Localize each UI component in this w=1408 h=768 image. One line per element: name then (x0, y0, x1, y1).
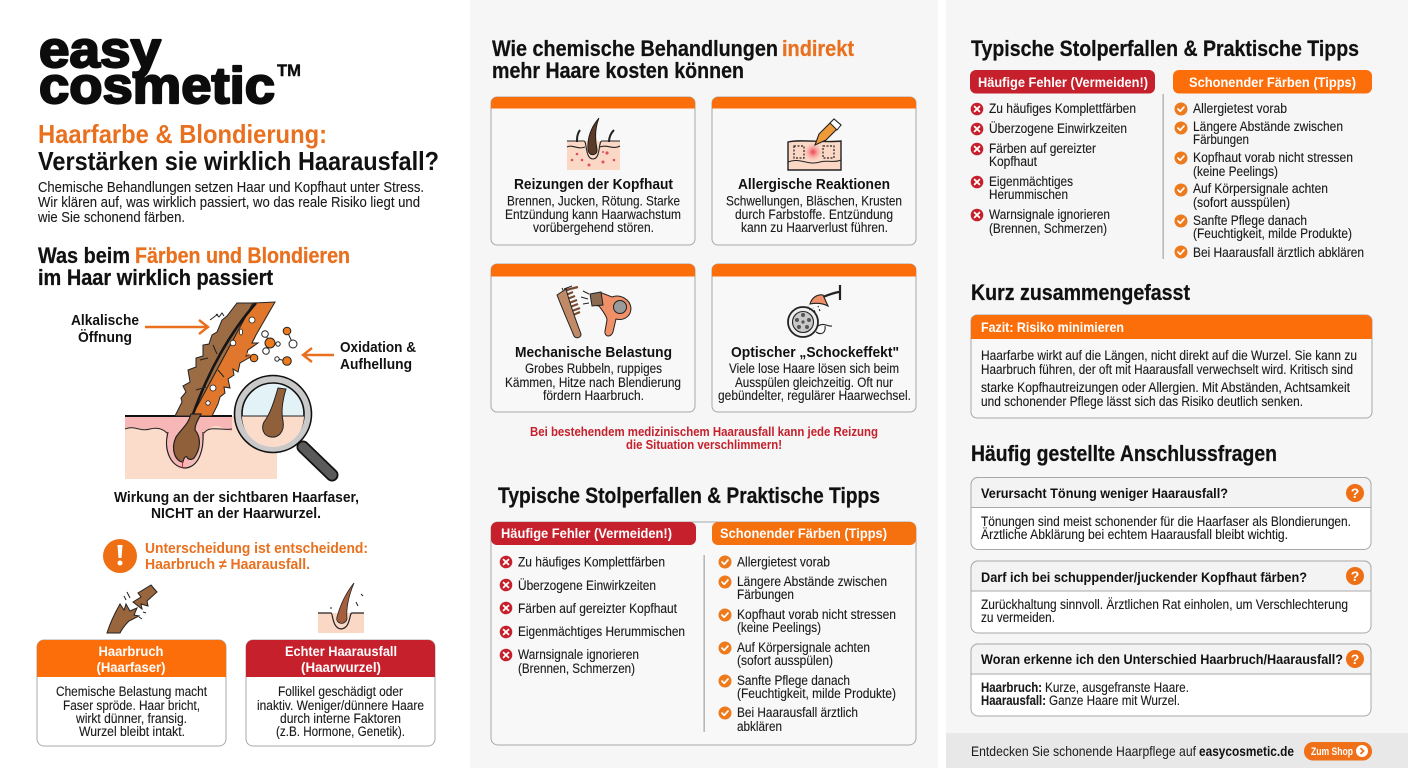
card: Echter Haarausfall: (Haarwurzel) (301, 659, 381, 675)
list: Fehler: Färben auf gereizter Kopfhaut (518, 601, 677, 616)
title: Haarfarbe & Blondierung: (38, 119, 327, 149)
list: Tipps: Färbungen (737, 587, 794, 602)
heading: Was beim Färben und Blondieren: Was beim (38, 243, 130, 268)
list: Tipps: (keine Peelings) (737, 620, 821, 635)
warning text: Bei bestehendem medizinischem Haarausfall kann jede Reizung (530, 424, 878, 439)
card: Echter Haarausfall: Follikel geschädigt oder (278, 684, 403, 699)
heading: Kurz zusammengefasst: Kurz zusammengefasst (971, 280, 1191, 305)
list: Fehler: Überzogene Einwirkzeiten (989, 121, 1127, 136)
card: Echter Haarausfall: Echter Haarausfall (285, 643, 397, 659)
list: Tipps: Auf Körpersignale achten (1193, 181, 1328, 196)
card: Haarbruch: (Haarfaser) (96, 659, 166, 675)
list: Tipps: Allergietest vorab (737, 554, 830, 570)
card: Fazit: Haarbruch führen, der oft mit Haarausfall verwechselt wird. Kritisch sind (981, 362, 1353, 377)
card: Allergische Reaktionen (712, 97, 916, 245)
heading: chemische Behandlungen (492, 36, 855, 83)
icon: molecules (240, 327, 297, 365)
icon: shower and drain (788, 285, 840, 337)
icon: comb and dryer (557, 286, 631, 338)
caption (114, 489, 359, 522)
intro text (37, 179, 424, 226)
FAQ 2 (971, 561, 1371, 633)
list: Tipps (1174, 101, 1364, 260)
panel: left column (37, 21, 439, 746)
card: Mechanische Belastung: Kämmen, Hitze nach Blendierung (505, 375, 681, 390)
label: Alkalische Öffnung (71, 312, 139, 346)
list: Fehler: Warnsignale ignorieren (518, 647, 639, 662)
list: Fehler: Eigenmächtiges (989, 174, 1073, 189)
card: Haarbruch: Faser spröde. Haar bricht, (63, 698, 200, 713)
FAQ 1 (971, 478, 1371, 550)
list: Fehler: (Brennen, Schmerzen) (989, 221, 1107, 236)
icon: allergy test (788, 119, 841, 170)
list: Tipps: (sofort ausspülen) (737, 653, 833, 668)
card: Haarbruch: Wurzel bleibt intakt. (79, 724, 185, 739)
list: Tipps: Auf Körpersignale achten (737, 640, 870, 655)
card: Mechanische Belastung: fördern Haarbruch. (543, 388, 644, 403)
list: Fehler: Färben auf gereizter (989, 141, 1096, 156)
list: Tipps: (Feuchtigkeit, milde Produkte) (737, 686, 896, 701)
label: Alkalische Öffnung: Alkalische (71, 312, 139, 329)
list: Tipps: (Feuchtigkeit, milde Produkte) (1193, 226, 1352, 241)
card: Echter Haarausfall (246, 640, 435, 746)
heading: Anschlussfragen: Häufig gestellte Anschlussfragen (971, 441, 1277, 466)
card: Haarbruch (37, 640, 226, 746)
list: Fehler: Kopfhaut (989, 154, 1037, 169)
heading: Was beim Färben und Blondieren: im Haar wirklich passiert (38, 265, 274, 290)
icon: broken hair (107, 585, 157, 633)
panel: Fehler und Tipps (491, 522, 916, 745)
heading: chemische Behandlungen: indirekt (782, 36, 855, 61)
panel: middle column (491, 36, 916, 745)
button: Zum Shop (1304, 742, 1372, 760)
divider (1162, 94, 1164, 259)
FAQ 3: Haarausfall: (981, 693, 1046, 708)
card: Fazit: starke Kopfhautreizungen oder Allergien. Mit Abständen, Achtsamkeit (981, 380, 1350, 395)
card: Fazit (971, 315, 1372, 418)
card: Optischer Schockeffekt: Viele lose Haare lösen sich beim (729, 361, 899, 376)
list: Tipps (718, 554, 896, 734)
list: Fehler: Zu häufiges Komplettfärben (518, 554, 665, 570)
warning text (530, 424, 878, 452)
list: Tipps: Bei Haarausfall ärztlich (737, 705, 858, 720)
FAQ 3 (971, 644, 1371, 716)
heading: Was beim Färben und Blondieren (38, 243, 350, 290)
list: Fehler: Warnsignale ignorieren (989, 207, 1110, 222)
button: Zum Shop: Zum Shop (1311, 746, 1353, 758)
card: Echter Haarausfall: durch interne Faktoren (280, 711, 401, 726)
panel: Fehler und Tipps: Schonender Färben (Tipps) (720, 525, 887, 541)
card: Mechanische Belastung: Grobes Rubbeln, ruppiges (525, 361, 662, 376)
badges: Fehler und Tipps: Schonender Färben (Tipps) (1189, 74, 1356, 90)
card: Mechanische Belastung (491, 264, 695, 412)
list: Tipps: Kopfhaut vorab nicht stressen (737, 607, 896, 622)
card: Optischer Schockeffekt: gebündelter, regulärer Haarwechsel. (718, 388, 911, 403)
card: Reizungen der Kopfhaut: Entzündung kann Haarwachstum (505, 207, 681, 222)
heading: Was beim Färben und Blondieren: Färben und Blondieren (135, 243, 350, 268)
list: Tipps: (keine Peelings) (1193, 164, 1278, 179)
card: Reizungen der Kopfhaut: Brennen, Jucken, Rötung. Starke (507, 194, 680, 208)
list: Tipps: Längere Abstände zwischen (1193, 119, 1343, 134)
FAQ 3: Kurze, ausgefranste Haare. (1045, 680, 1189, 695)
list: Fehler (500, 554, 685, 676)
heading: chemische Behandlungen: mehr Haare kosten können (492, 58, 744, 83)
warning text: die Situation verschlimmern! (626, 437, 782, 452)
logo (39, 21, 301, 114)
FAQ 3: Haarbruch: (981, 680, 1042, 695)
card: Fazit: und schonender Pflege lässt sich das Risiko deutlich senken. (981, 394, 1303, 409)
list: Fehler: Überzogene Einwirkzeiten (518, 578, 656, 593)
list: Fehler: Zu häufiges Komplettfärben (989, 101, 1136, 116)
label: Alkalische Öffnung: Öffnung (78, 329, 132, 346)
heading: Stolperfallen: Typische Stolperfallen & Praktische Tipps (971, 36, 1359, 61)
list: Fehler (971, 101, 1136, 236)
caption: NICHT an der Haarwurzel. (151, 505, 321, 522)
list: Fehler: Eigenmächtiges Herummischen (518, 624, 685, 639)
footer bar: easycosmetic.de (1199, 743, 1294, 759)
list: Fehler: (Brennen, Schmerzen) (518, 661, 635, 676)
card: Allergische Reaktionen: Schwellungen, Bläschen, Krusten (726, 194, 902, 208)
badges: Fehler und Tipps (970, 70, 1372, 94)
panel: right column (946, 36, 1408, 768)
logo: TM (277, 61, 301, 80)
icon: magnifier (234, 376, 332, 475)
card: Echter Haarausfall: inaktiv. Weniger/dünnere Haare (257, 698, 424, 713)
FAQ 3: Ganze Haare mit Wurzel. (1049, 693, 1180, 708)
footer bar (946, 733, 1408, 768)
label: Oxidation und Aufhellung: Oxidation & (340, 339, 416, 356)
list: Tipps: Sanfte Pflege danach (737, 673, 850, 688)
logo: easy (39, 21, 162, 78)
icon: follicle (318, 583, 364, 633)
list: Fehler: Herummischen (989, 187, 1068, 202)
FAQ 1: Tönungen sind meist schonender für die Haarfaser als Blondierungen. (981, 514, 1351, 529)
logo: cosmetic (39, 57, 275, 114)
FAQ 1: Verursacht Tönung weniger Haarausfall? (981, 485, 1228, 501)
illustration: hair fiber and follicle (125, 302, 332, 479)
card: Optischer Schockeffekt: Ausspülen gleichzeitig. Oft nur (735, 375, 893, 390)
FAQ 2: Darf ich bei schuppender/juckender Kopfhaut färben? (981, 569, 1307, 585)
label: Oxidation und Aufhellung: Aufhellung (340, 356, 412, 373)
callout: Unterscheidung: Haarbruch ≠ Haarausfall. (145, 556, 310, 573)
heading: chemische Behandlungen: Wie chemische Behandlungen (492, 36, 778, 61)
card: Allergische Reaktionen: kann zu Haarverlust führen. (741, 220, 888, 235)
card: Reizungen der Kopfhaut (491, 97, 695, 245)
list: Tipps: Bei Haarausfall ärztlich abklären (1193, 245, 1364, 260)
card: Allergische Reaktionen: durch Farbstoffe. Entzündung (735, 207, 893, 222)
list: Tipps: Längere Abstände zwischen (737, 574, 887, 589)
list: Tipps: Färbungen (1193, 132, 1249, 147)
list: Tipps: Sanfte Pflege danach (1193, 213, 1307, 228)
intro text: Wir klären auf, was wirklich passiert, wo das reale Risiko liegt und (38, 194, 420, 211)
heading: Stolperfallen: Typische Stolperfallen & Praktische Tipps (498, 483, 880, 508)
footer bar: Entdecken Sie schonende Haarpflege auf (971, 743, 1196, 759)
FAQ 3: Woran erkenne ich den Unterschied Haarbruch/Haarausfall? (981, 651, 1343, 667)
panel: Fehler und Tipps: Häufige Fehler (Vermeiden!) (501, 525, 672, 541)
card: Reizungen der Kopfhaut: Reizungen der Kopfhaut (514, 176, 673, 193)
card: Haarbruch: Haarbruch (98, 643, 164, 659)
card: Optischer Schockeffekt: Optischer „Schockeffekt" (731, 344, 899, 361)
label: Oxidation und Aufhellung (340, 339, 416, 373)
card: Echter Haarausfall: (z.B. Hormone, Genetik). (276, 724, 405, 739)
intro text: Chemische Behandlungen setzen Haar und Kopfhaut unter Stress. (38, 179, 424, 196)
arrow: to molecules (303, 348, 334, 362)
card: Optischer Schockeffekt (712, 264, 916, 412)
callout: Unterscheidung (145, 540, 368, 573)
badges: Fehler und Tipps: Häufige Fehler (Vermeiden!) (978, 74, 1148, 90)
card: Reizungen der Kopfhaut: vorübergehend stören. (533, 220, 654, 235)
card: Fazit: Haarfarbe wirkt auf die Längen, nicht direkt auf die Wurzel. Sie kann zu (981, 348, 1357, 363)
card: Fazit: Fazit: Risiko minimieren (981, 319, 1124, 335)
title: Verstärken sie wirklich Haarausfall? (38, 146, 439, 176)
list: Tipps: (sofort ausspülen) (1193, 195, 1290, 210)
FAQ 2: Zurückhaltung sinnvoll. Ärztlichen Rat einholen, um Verschlechterung (981, 597, 1348, 612)
intro text: wie Sie schonend färben. (37, 209, 185, 226)
card: Allergische Reaktionen: Allergische Reaktionen (738, 176, 890, 193)
arrow: to cuticle (145, 320, 208, 334)
FAQ 2: zu vermeiden. (981, 610, 1055, 625)
icon: irritated scalp (567, 118, 620, 170)
title (38, 119, 439, 176)
list: Tipps: abklären (737, 719, 782, 734)
FAQ 1: Ärztliche Abklärung bei echtem Haarausfall bleibt wichtig. (981, 527, 1288, 542)
card: Haarbruch: wirkt dünner, fransig. (75, 711, 187, 726)
caption: Wirkung an der sichtbaren Haarfaser, (114, 489, 359, 506)
list: Tipps: Allergietest vorab (1193, 101, 1287, 116)
card: Mechanische Belastung: Mechanische Belastung (515, 344, 672, 361)
icon: warning (103, 539, 137, 573)
callout: Unterscheidung: Unterscheidung ist entscheidend: (145, 540, 368, 557)
card: Haarbruch: Chemische Belastung macht (56, 684, 207, 699)
list: Tipps: Kopfhaut vorab nicht stressen (1193, 150, 1353, 165)
